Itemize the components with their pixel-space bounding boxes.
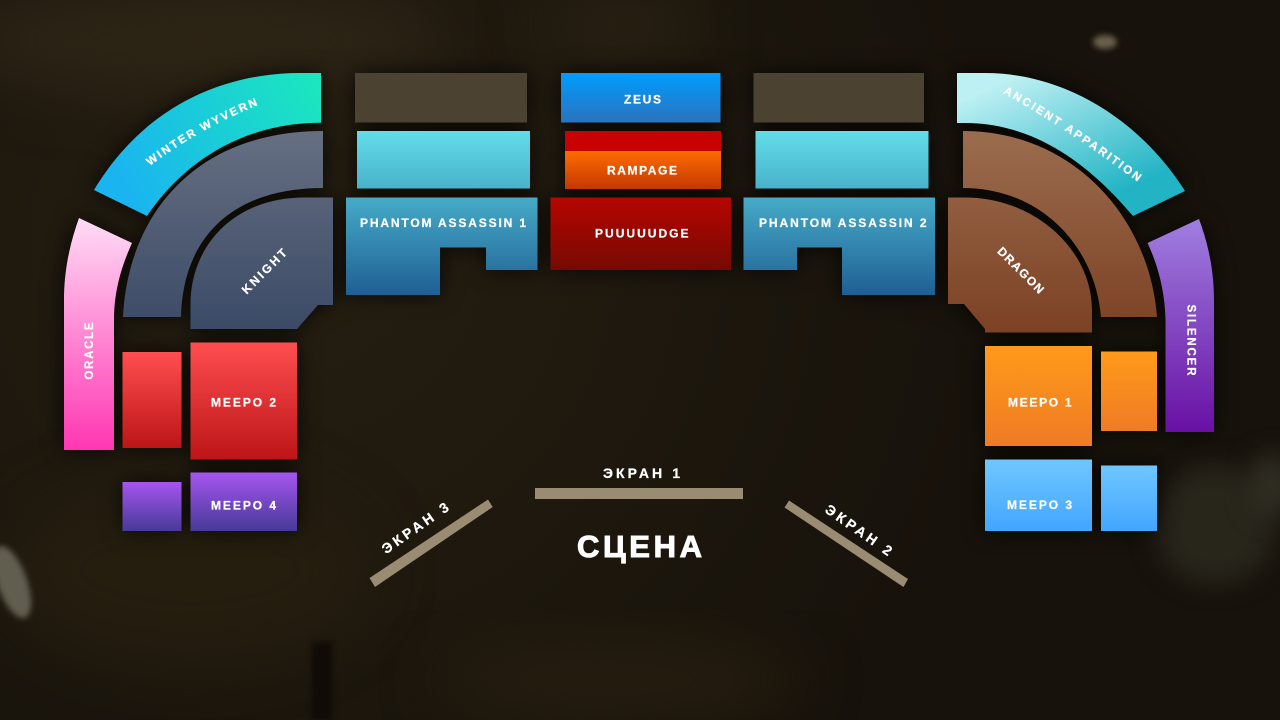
section: Ancient Apparition	[956, 72, 1209, 256]
block: red side	[122, 352, 182, 448]
section: Dragon	[948, 198, 1092, 332]
block: grey top left	[355, 73, 527, 122]
section: grey arc	[123, 131, 323, 317]
section: Meepo 2: MEEPO 2	[211, 396, 276, 410]
screen 2	[784, 500, 908, 587]
stage title: СЦЕНА	[577, 529, 702, 564]
section: Rampage	[565, 131, 721, 189]
section: Meepo 4: MEEPO 4	[211, 498, 276, 512]
section: Phantom Assassin 2: PHANTOM ASSASSIN 2	[759, 216, 927, 230]
screen 2: ЭКРАН 2	[822, 501, 896, 559]
section: Phantom Assassin 1	[346, 198, 538, 295]
section: Winter Wyvern	[68, 66, 327, 256]
section: Zeus: ZEUS	[624, 92, 661, 106]
block: sky side	[1101, 466, 1157, 531]
screen 1: ЭКРАН 1	[603, 465, 680, 481]
section: Rampage: RAMPAGE	[607, 164, 677, 178]
block: cyan left	[357, 131, 530, 188]
section: Dragon: DRAGON	[994, 244, 1047, 297]
section: Meepo 3	[985, 460, 1092, 531]
section: Meepo 1	[985, 346, 1092, 446]
section: Puuuuudge: PUUUUUDGE	[595, 226, 688, 240]
screen 3: ЭКРАН 3	[379, 499, 452, 557]
section: Phantom Assassin 2	[744, 198, 935, 295]
block: orange side	[1101, 352, 1157, 431]
section: brown arc	[963, 131, 1157, 317]
section: Zeus	[561, 73, 720, 122]
screen 3	[370, 499, 493, 587]
section: Meepo 2	[190, 342, 297, 460]
screen 1	[535, 465, 743, 499]
section: Silencer	[1148, 219, 1214, 432]
section: Silencer: SILENCER	[1184, 304, 1196, 376]
section: Meepo 4	[190, 472, 297, 531]
section: Oracle: ORACLE	[84, 322, 96, 380]
section: Phantom Assassin 1: PHANTOM ASSASSIN 1	[360, 216, 526, 230]
block: purple side	[122, 482, 182, 531]
section: Puuuuudge	[550, 198, 731, 270]
block: grey top right	[754, 73, 924, 122]
section: Knight	[190, 198, 333, 329]
section: Ancient Apparition: ANCIENT APPARITION	[1003, 88, 1142, 182]
seating plan	[60, 66, 1215, 537]
block: cyan right	[756, 131, 928, 188]
section: Meepo 3: MEEPO 3	[1007, 498, 1072, 512]
section: Oracle	[64, 218, 132, 450]
section: Knight: KNIGHT	[239, 245, 290, 297]
section: Winter Wyvern: WINTER WYVERN	[145, 98, 258, 165]
section: Meepo 1: MEEPO 1	[1008, 396, 1072, 410]
